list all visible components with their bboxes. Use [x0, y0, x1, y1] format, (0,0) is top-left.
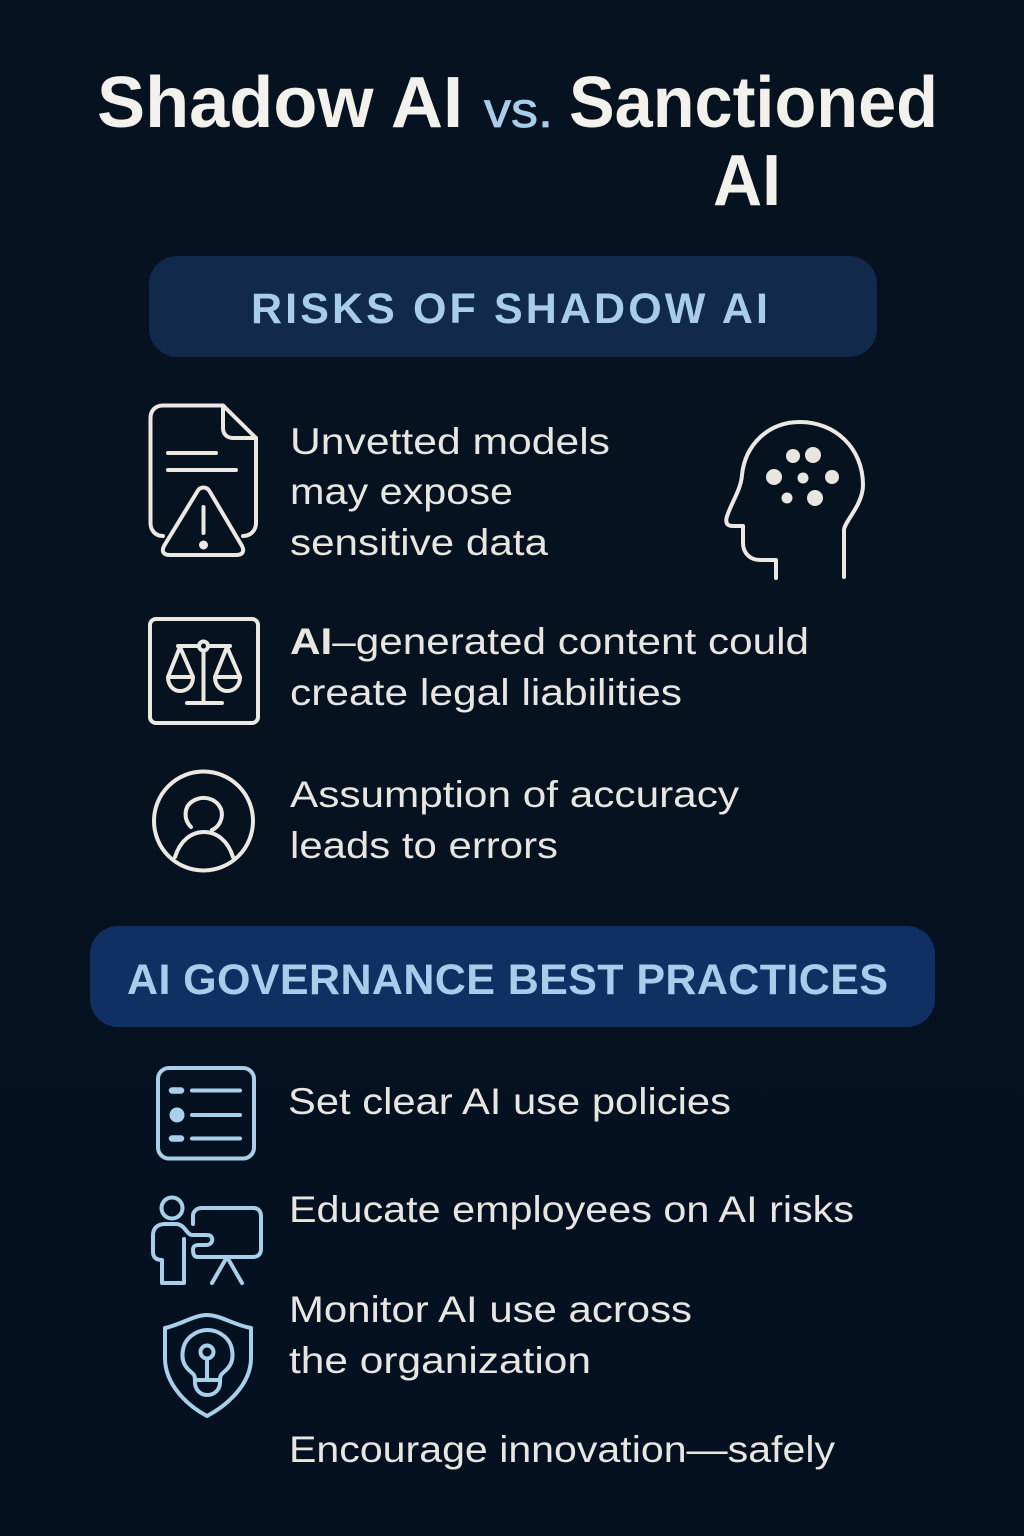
- icon: head with dots: [726, 422, 863, 578]
- text: legal liabilities: [290, 620, 809, 713]
- text: monitor AI use: [289, 1288, 692, 1381]
- text: assumption of accuracy: [290, 773, 739, 866]
- text: legal liabilities: create legal liabilities: [290, 671, 682, 713]
- icon: policy list: [158, 1068, 254, 1158]
- title: vs.: [484, 82, 553, 138]
- icon: shield with lightbulb: [165, 1315, 251, 1416]
- text: monitor AI use: Monitor AI use across: [289, 1288, 692, 1330]
- text: legal liabilities: AI–generated content could: [290, 620, 809, 662]
- title: AI: [713, 141, 781, 221]
- text: clear policies: Set clear AI use policies: [288, 1080, 731, 1122]
- title: [97, 63, 938, 221]
- icon: scales of justice: [150, 619, 258, 723]
- text: assumption of accuracy: Assumption of accuracy: [290, 773, 739, 815]
- icon: person in circle: [154, 772, 253, 870]
- text: encourage innovation: Encourage innovation—safely: [289, 1428, 835, 1470]
- text: monitor AI use: the organization: [289, 1339, 591, 1381]
- icon: presenter at board: [153, 1198, 261, 1283]
- text: unvetted models: [290, 420, 610, 563]
- text: unvetted models: may expose: [290, 470, 513, 512]
- title: Sanctioned: [569, 63, 938, 143]
- text: assumption of accuracy: leads to errors: [290, 824, 558, 866]
- text: unvetted models: sensitive data: [290, 521, 548, 563]
- heading: risks of shadow AI: [149, 256, 877, 357]
- heading: risks of shadow AI: RISKS OF SHADOW AI: [251, 285, 768, 333]
- heading: AI governance best practices: [90, 926, 935, 1027]
- text: educate employees: Educate employees on AI risks: [289, 1188, 854, 1230]
- heading: AI governance best practices: AI GOVERNANCE BEST PRACTICES: [127, 956, 888, 1004]
- title: Shadow AI: [97, 63, 463, 143]
- text: unvetted models: Unvetted models: [290, 420, 610, 462]
- icon: document with warning: [150, 406, 256, 555]
